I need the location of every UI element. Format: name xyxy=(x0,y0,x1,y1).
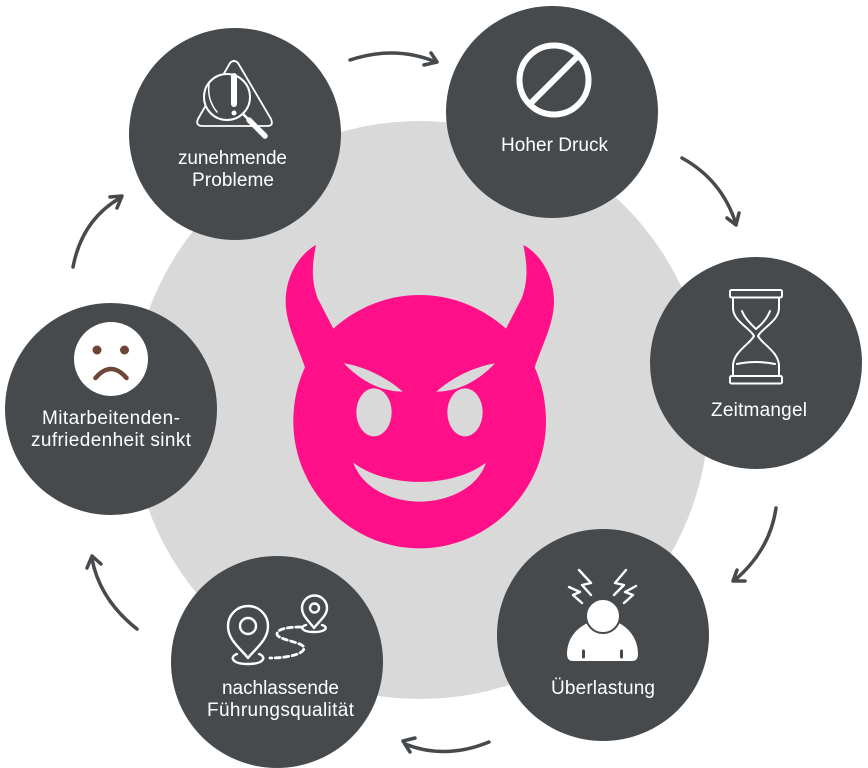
panel: Hoher Druck: Hoher Druck xyxy=(501,135,608,156)
panel: Zeitmangel: Zeitmangel xyxy=(711,400,807,421)
background circle xyxy=(131,121,709,699)
icon: map pins with dashed route xyxy=(228,596,327,664)
panel: Überlastung: Überlastung xyxy=(551,678,655,699)
icon: prohibition sign xyxy=(520,46,588,114)
icon: warning triangle with magnifier xyxy=(197,61,272,136)
arrow: Zeitmangel to Überlastung xyxy=(733,508,776,581)
icon: overloaded person xyxy=(567,570,638,661)
icon: sad face xyxy=(74,322,148,396)
arrow: Führungsqualität to Mitarbeitendenzufriedenheit xyxy=(87,556,137,629)
panel: Zeitmangel xyxy=(650,257,862,469)
panel: Mitarbeitendenzufriedenheit sinkt: Mitarbeitenden- xyxy=(42,408,180,429)
icon: hourglass xyxy=(730,290,782,384)
panel: zunehmende Probleme: zunehmende xyxy=(178,148,287,169)
icon: pink devil face xyxy=(286,245,554,548)
panel: nachlassende Führungsqualität: Führungsqualität xyxy=(207,700,355,721)
panel: nachlassende Führungsqualität: nachlassende xyxy=(222,678,339,699)
panel: Hoher Druck xyxy=(446,6,658,218)
arrow: Hoher Druck to Zeitmangel xyxy=(682,158,739,225)
panel: Mitarbeitendenzufriedenheit sinkt xyxy=(5,303,217,515)
arrow: Überlastung to Führungsqualität xyxy=(403,738,489,752)
panel: Mitarbeitendenzufriedenheit sinkt: zufriedenheit sinkt xyxy=(31,430,192,451)
panel: zunehmende Probleme: Probleme xyxy=(192,170,274,191)
panel: Überlastung xyxy=(497,529,709,741)
panel: nachlassende Führungsqualität xyxy=(171,556,383,768)
panel: zunehmende Probleme xyxy=(129,28,341,240)
arrow: Probleme to Hoher Druck xyxy=(350,53,437,65)
arrow: Mitarbeitendenzufriedenheit to Probleme xyxy=(73,196,122,267)
